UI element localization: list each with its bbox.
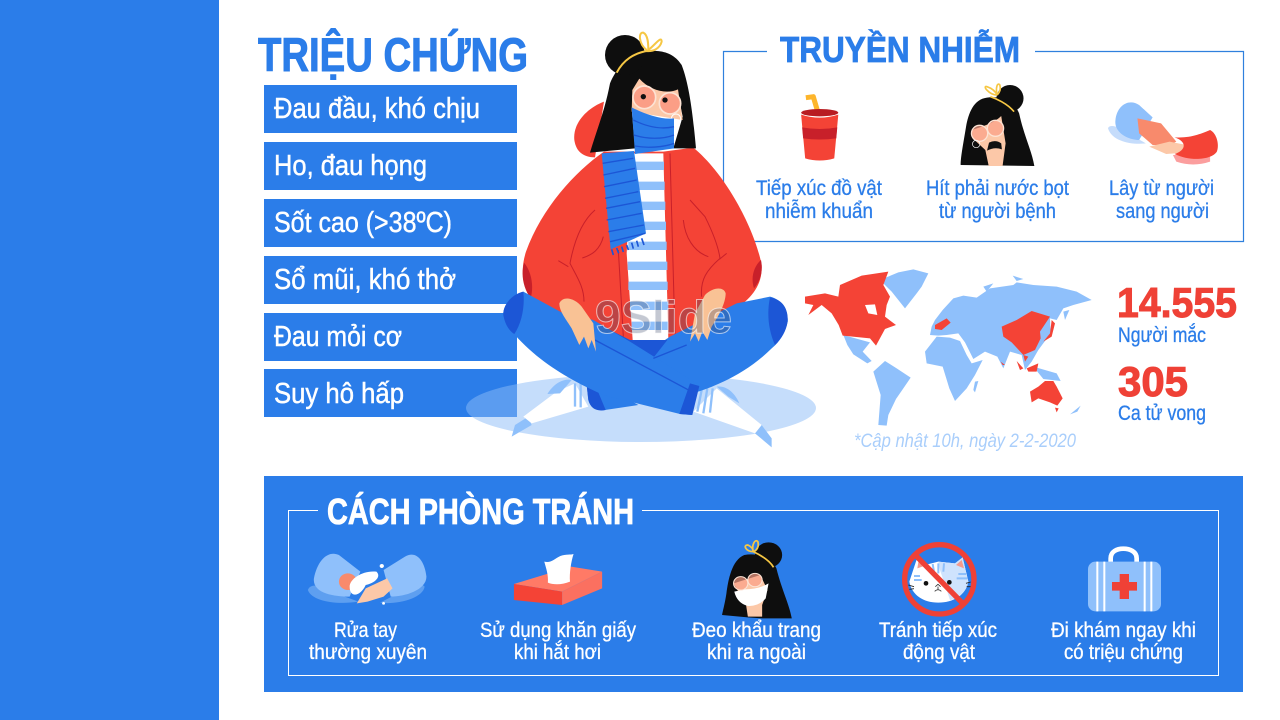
panel: symptom list: Đau mỏi cơ bbox=[274, 321, 402, 353]
icon: hand to hand bbox=[1108, 102, 1218, 164]
statistic: deaths bbox=[1118, 358, 1206, 425]
icon: medical kit bbox=[1088, 549, 1161, 611]
statistic: deaths: 305 bbox=[1118, 358, 1188, 405]
heading: transmission: TRUYỀN NHIỄM bbox=[780, 28, 1020, 70]
panel: symptom list: Suy hô hấp bbox=[274, 378, 404, 410]
floor shadow bbox=[466, 374, 816, 442]
glasses bbox=[633, 86, 681, 114]
caption: avoid animals: động vật bbox=[903, 641, 975, 664]
caption: wear mask: Đeo khẩu trang bbox=[692, 619, 821, 642]
caption: avoid animals bbox=[879, 619, 997, 664]
panel: symptom list: Sổ mũi, khó thở bbox=[274, 264, 456, 296]
shirt bbox=[627, 153, 668, 342]
left blue band bbox=[0, 0, 219, 720]
scarf tail bbox=[602, 151, 646, 255]
left foot bbox=[512, 380, 588, 437]
caption: avoid animals: Tránh tiếp xúc bbox=[879, 619, 997, 642]
statistic: deaths: Ca tử vong bbox=[1118, 402, 1206, 425]
panel: symptom list: Sốt cao (>38ºC) bbox=[274, 207, 452, 239]
caption: contaminated objects: nhiễm khuẩn bbox=[765, 200, 873, 223]
panel: prevention bbox=[264, 476, 1243, 692]
icon: washing hands bbox=[308, 554, 426, 605]
scarf around face bbox=[632, 107, 674, 154]
caption: person to person: Lây từ người bbox=[1109, 177, 1214, 200]
Canada lakes bbox=[865, 304, 877, 315]
panel frame: transmission bbox=[724, 52, 1244, 242]
caption: use tissue: Sử dụng khăn giấy bbox=[480, 619, 636, 642]
icon: no animal contact bbox=[905, 545, 974, 614]
illustration: girl sitting with scarf bbox=[503, 33, 788, 447]
statistic: cases: Người mắc bbox=[1118, 324, 1206, 347]
panel: symptom list: Ho, đau họng bbox=[274, 150, 427, 182]
world map bbox=[805, 269, 1092, 426]
legs bbox=[503, 292, 788, 415]
caption: use tissue bbox=[480, 619, 636, 664]
caption: droplets: từ người bệnh bbox=[939, 200, 1056, 223]
ribbon bbox=[617, 33, 662, 73]
watermark: 9Slide bbox=[595, 291, 732, 343]
panel: symptom list bbox=[264, 85, 517, 417]
icon: red cup bbox=[801, 97, 838, 160]
right foot bbox=[693, 386, 772, 447]
statistic: cases: 14.555 bbox=[1117, 279, 1237, 326]
earring bbox=[671, 114, 681, 123]
caption: see a doctor: có triệu chứng bbox=[1064, 641, 1183, 664]
update note: *Cập nhật 10h, ngày 2-2-2020 bbox=[854, 431, 1076, 452]
highlighted countries bbox=[805, 272, 1063, 412]
caption: person to person: sang người bbox=[1116, 200, 1209, 223]
heading: prevention: CÁCH PHÒNG TRÁNH bbox=[327, 490, 634, 532]
jacket fold lines bbox=[558, 153, 727, 337]
caption: contaminated objects: Tiếp xúc đồ vật bbox=[756, 177, 882, 200]
caption: wash hands: Rửa tay bbox=[334, 619, 397, 642]
caption: use tissue: khi hắt hơi bbox=[514, 641, 601, 664]
caption: see a doctor bbox=[1051, 619, 1196, 664]
sleeve shading bbox=[523, 260, 762, 298]
caption: droplets bbox=[926, 177, 1069, 223]
caption: droplets: Hít phải nước bọt bbox=[926, 177, 1069, 200]
jacket bbox=[523, 148, 762, 342]
hands bbox=[559, 289, 726, 352]
caption: contaminated objects bbox=[756, 177, 882, 223]
caption: wear mask: khi ra ngoài bbox=[707, 641, 806, 664]
heading: symptoms: TRIỆU CHỨNG bbox=[258, 28, 528, 81]
hair bbox=[590, 51, 696, 153]
icon: tissue box bbox=[514, 554, 602, 605]
panel: symptom list: Đau đầu, khó chịu bbox=[274, 93, 480, 125]
hair bun bbox=[605, 35, 645, 75]
land masses bbox=[843, 269, 1092, 426]
caption: see a doctor: Đi khám ngay khi bbox=[1051, 619, 1196, 642]
caption: wash hands bbox=[309, 619, 427, 664]
icon: sneezing girl bbox=[961, 84, 1034, 166]
hood bbox=[574, 102, 604, 157]
face bbox=[632, 79, 683, 120]
caption: wash hands: thường xuyên bbox=[309, 641, 427, 664]
caption: wear mask bbox=[692, 619, 821, 664]
back ankle bbox=[587, 383, 638, 410]
statistic: cases bbox=[1117, 279, 1237, 347]
caption: person to person bbox=[1109, 177, 1214, 223]
icon: girl with mask bbox=[722, 541, 792, 618]
